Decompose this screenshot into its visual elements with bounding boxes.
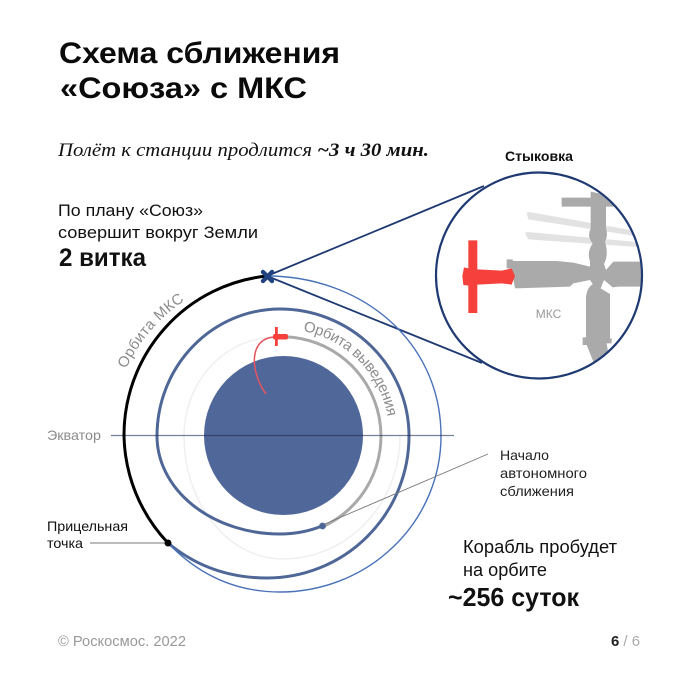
aim point label: точка (47, 535, 83, 551)
Soyuz ship (462, 240, 515, 313)
text: two orbits: 2 витка (59, 244, 147, 272)
ISS orbit label: Орбита МКС (118, 294, 183, 367)
orbit: transfer spiral (157, 309, 409, 578)
orbit: thin approach (168, 276, 441, 592)
time on orbit text: ~256 суток (448, 582, 580, 612)
page number: 6 / 6 (611, 633, 640, 650)
flight time subtitle: Полёт к станции продлится ~3 ч 30 мин. (57, 141, 429, 161)
orbit: ISS arc (124, 276, 267, 543)
text: two orbits: совершит вокруг Земли (58, 223, 258, 242)
time on orbit text (448, 537, 617, 612)
icon: docking cross (263, 272, 272, 281)
autonomous approach label: автономного (500, 465, 587, 481)
title: Схема сближения (59, 37, 340, 70)
text: two orbits (58, 201, 258, 272)
equator label: Экватор (47, 427, 101, 443)
docking lens (436, 172, 643, 378)
title (59, 37, 340, 105)
insertion orbit label: Орбита выведения (304, 322, 396, 416)
autonomous approach label (500, 447, 587, 499)
callout lines to docking lens (267, 186, 484, 363)
autonomous approach label: Начало (500, 447, 549, 463)
autonomous approach label: сближения (500, 483, 574, 499)
autonomous approach start marker (319, 523, 326, 529)
docking heading: Стыковка (505, 148, 573, 164)
aim point label: Прицельная (47, 518, 128, 534)
icon: small Soyuz (273, 327, 288, 346)
ISS label: МКС (536, 307, 562, 321)
time on orbit text: на орбите (463, 560, 547, 580)
text: two orbits: По плану «Союз» (58, 201, 203, 220)
orbit: insertion arc (285, 337, 381, 527)
ISS station (507, 192, 643, 362)
leader line: autonomous approach (325, 454, 488, 524)
launch trajectory (254, 337, 276, 394)
aim point leader (90, 542, 168, 544)
aim point marker (164, 540, 172, 546)
earth (204, 356, 363, 515)
time on orbit text: Корабль пробудет (463, 537, 617, 557)
aim point label (47, 518, 128, 551)
source footer: © Роскосмос. 2022 (58, 633, 186, 650)
equator line (111, 434, 454, 436)
orbit: pale parking path (184, 337, 400, 559)
title: «Союза» с МКС (60, 72, 307, 105)
orbit diagram (90, 272, 488, 592)
